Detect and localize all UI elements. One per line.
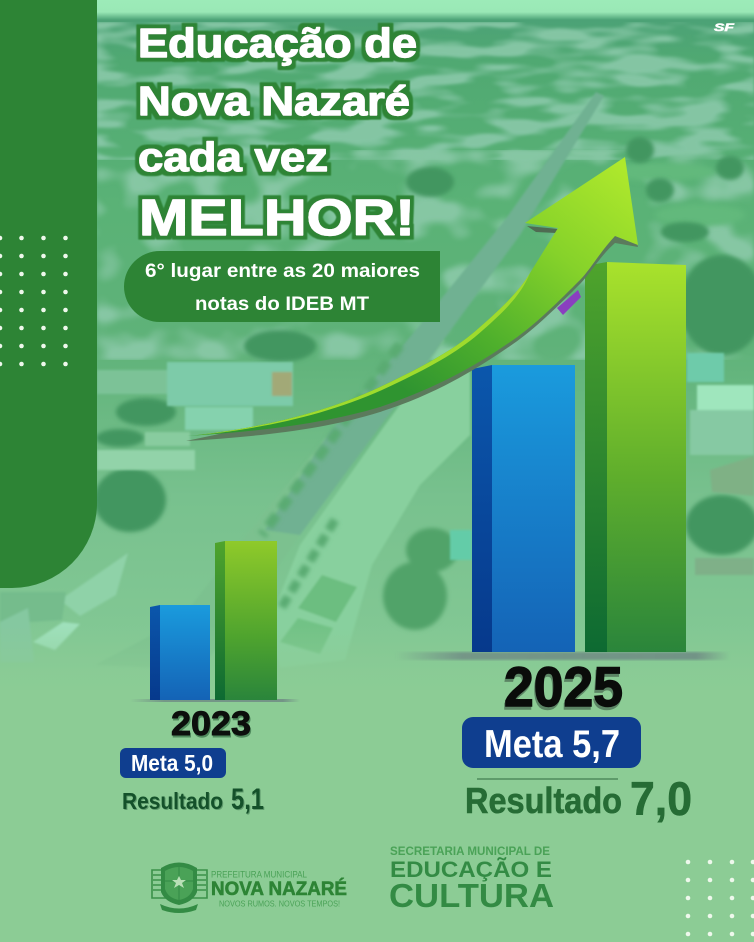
title: MELHOR!: [139, 189, 415, 246]
title: Nova Nazaré: [138, 78, 410, 124]
left green side panel: [0, 0, 97, 588]
logo: Prefeitura Municipal Nova Nazaré: [152, 862, 347, 913]
bar chart 2025: [395, 262, 730, 660]
result 2023: 5,1: [231, 783, 264, 816]
distant tree line: [97, 22, 754, 160]
road and green median: [95, 92, 604, 670]
logo: Prefeitura Municipal Nova Nazaré: NOVA NAZARÉ: [211, 878, 347, 900]
result 2023: [122, 783, 264, 816]
year label 2025: 2025: [504, 655, 623, 718]
logo: Secretaria Municipal de Educação e Cultura: CULTURA: [389, 877, 554, 914]
ranking pill: notas do IDEB MT: [195, 293, 369, 315]
result 2025: Resultado: [465, 780, 622, 821]
title: Educação de: [138, 20, 417, 66]
result 2023: Resultado: [122, 788, 223, 814]
nearer tree clumps: [97, 150, 754, 360]
ranking pill: [124, 251, 440, 322]
bar chart 2023: [130, 541, 300, 702]
dot grid: left: [0, 236, 68, 366]
year label 2023: 2023: [171, 705, 251, 743]
large trees by the sidewalk: [383, 528, 458, 630]
dot grid: bottom right: [686, 860, 754, 936]
buildings: [0, 353, 754, 662]
logo: Secretaria Municipal de Educação e Cultura: [389, 844, 554, 914]
result 2025: 7,0: [630, 772, 692, 825]
watermark: SF: SF: [714, 22, 734, 34]
ranking pill: 6° lugar entre as 20 maiores: [145, 260, 420, 282]
logo: Secretaria Municipal de Educação e Cultura: SECRETARIA MUNICIPAL DE: [390, 844, 550, 858]
title: cada vez: [138, 134, 328, 180]
palm rows along the road: [262, 345, 400, 610]
badge: Meta 5,0: Meta 5,0: [131, 750, 213, 776]
logo: Secretaria Municipal de Educação e Cultura: EDUCAÇÃO E: [390, 857, 552, 882]
icon: municipal coat of arms: [152, 862, 207, 913]
result 2025: [465, 772, 692, 825]
logo: Prefeitura Municipal Nova Nazaré: NOVOS RUMOS. NOVOS TEMPOS!: [219, 898, 340, 908]
arrow: growth curve: [186, 157, 638, 441]
logo: Prefeitura Municipal Nova Nazaré: PREFEITURA MUNICIPAL: [211, 870, 307, 880]
icon: purple tag behind arrow: [557, 290, 581, 315]
badge: Meta 5,7: Meta 5,7: [484, 723, 620, 766]
title: [138, 20, 417, 246]
